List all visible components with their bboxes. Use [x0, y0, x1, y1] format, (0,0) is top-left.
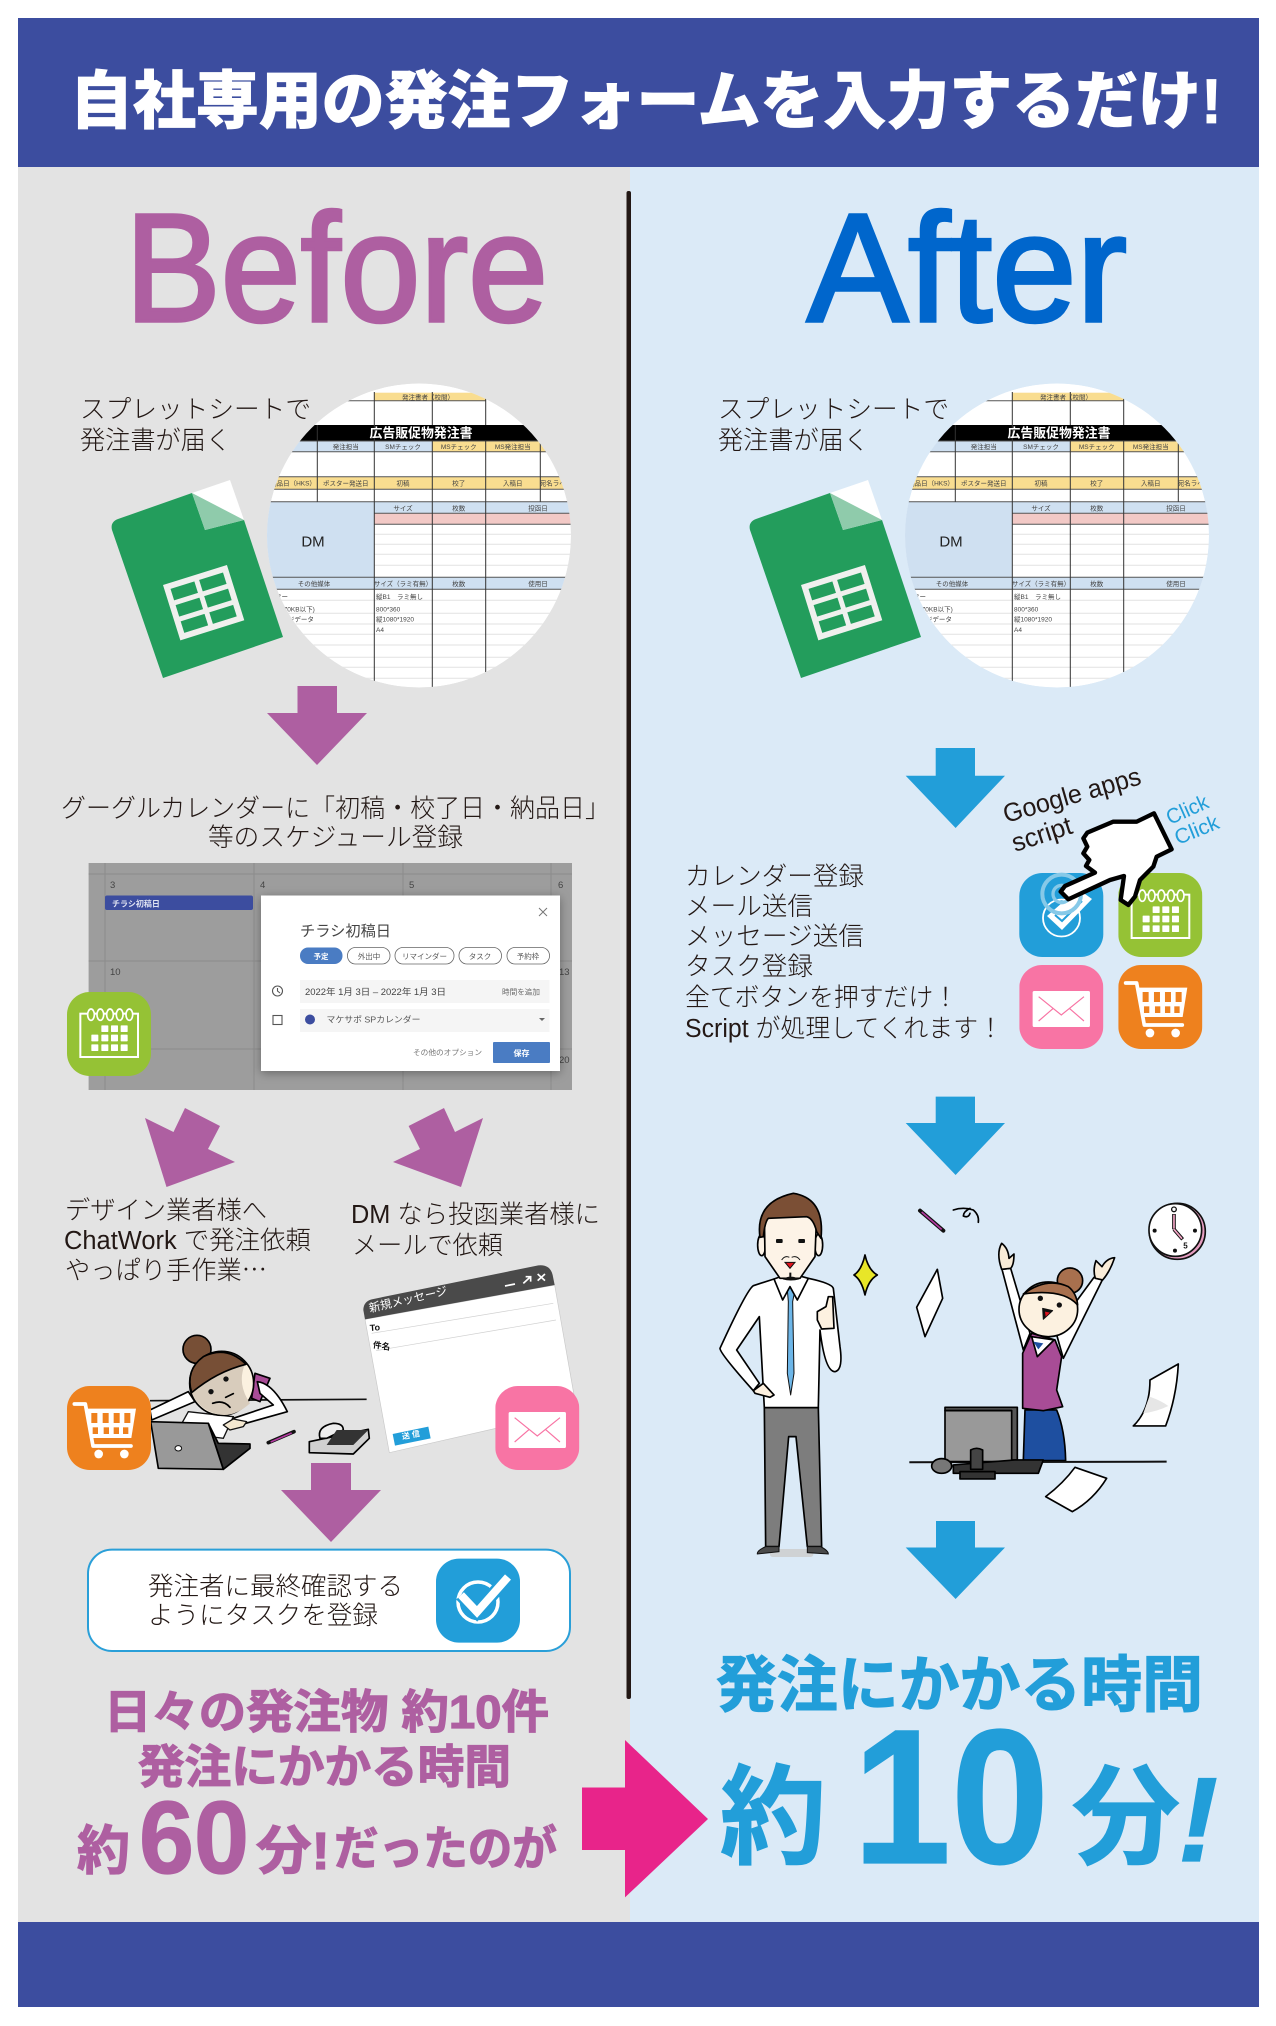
text: after spreadsheet note: スプレットシートで	[718, 396, 949, 424]
chart: after order sheet circle: 納品日（HKS）	[908, 478, 954, 488]
label: Google apps script: Google apps	[999, 761, 1144, 829]
chart: after order sheet circle: A4	[1014, 627, 1022, 634]
chart: after order sheet circle: 800*360	[1014, 606, 1039, 614]
label: Google apps script	[999, 761, 1144, 858]
icon: task check	[436, 1559, 520, 1643]
chart: after order sheet circle: 入稿日	[1141, 478, 1160, 488]
icon: mail app (after)	[1019, 965, 1103, 1049]
chart: before order sheet circle: 入稿日	[503, 478, 522, 488]
label: Click Click: Click	[1163, 790, 1213, 830]
chart: before order sheet circle: 発注担当	[333, 442, 359, 451]
chart: before order sheet circle: 納品日（HKS）	[270, 478, 316, 488]
icon: calendar app (before)	[67, 992, 151, 1076]
chart: after order sheet circle: 使用日	[1166, 579, 1186, 588]
text: after result	[716, 1651, 1218, 1904]
icon: mail app (before)	[495, 1386, 579, 1470]
chart: after order sheet circle	[898, 384, 1218, 688]
chart: before order sheet circle: 初稿	[396, 478, 410, 488]
arrow: before down 2	[281, 1463, 381, 1542]
chart: after order sheet circle: サイズ	[1031, 504, 1051, 512]
callout: task registration	[88, 1550, 570, 1651]
text: button actions: タスク登録	[685, 953, 813, 981]
event dialog: タスク	[469, 952, 491, 961]
arrow: before diagonal right	[393, 1108, 483, 1187]
text: calendar step: グーグルカレンダーに「初稿・校了日・納品日」	[61, 795, 610, 823]
event dialog: リマインダー	[402, 951, 447, 961]
chart: after order sheet circle: 発注担当	[971, 442, 997, 451]
text: after result: !	[1178, 1753, 1218, 1887]
calendar screenshot: 3	[110, 880, 115, 891]
text: button actions: メッセージ送信	[685, 923, 864, 951]
chart: after order sheet circle: 宛名ラベル	[1178, 478, 1211, 488]
icon: cart app (after)	[1118, 965, 1202, 1049]
calendar screenshot: 6	[558, 880, 563, 891]
text: DM vendor step	[351, 1201, 600, 1260]
illustration: businessman thumbs up	[720, 1193, 877, 1557]
chart: before order sheet circle: 縦1080*1920	[376, 614, 414, 624]
panel: before	[18, 167, 630, 1922]
event dialog: マケサポ SPカレンダー	[326, 1014, 420, 1024]
chart: after order sheet circle: サイズ（ラミ有無）	[1012, 579, 1070, 588]
calendar screenshot: 13	[559, 967, 570, 978]
email compose window: 送 信	[401, 1428, 421, 1441]
email compose window: To	[369, 1322, 381, 1333]
center divider	[626, 191, 631, 1699]
chart: before order sheet circle: 縦B1 ラミ無し	[376, 592, 423, 601]
text: design vendor step	[64, 1197, 311, 1287]
text: button actions: カレンダー登録	[685, 863, 864, 891]
text: before result: 発注にかかる時間	[138, 1741, 511, 1793]
text: calendar step: 等のスケジュール登録	[208, 824, 463, 852]
email compose window: 新規メッセージ	[368, 1284, 449, 1315]
chart: before order sheet circle: サイネージデータ	[262, 614, 314, 624]
label: Google apps script: script	[1008, 810, 1077, 858]
chart: before order sheet circle: サイズ	[393, 504, 413, 512]
arrow: after down 2	[906, 1097, 1005, 1175]
chart: before order sheet circle: MS発注担当	[495, 442, 531, 451]
footer band	[18, 1922, 1259, 2007]
event dialog	[261, 896, 560, 1071]
title: 自社専用の発注フォームを入力するだけ!	[70, 67, 1222, 137]
illustration: happy woman at desk	[909, 1203, 1205, 1512]
text: before result: 日々の発注物 約10件	[104, 1686, 549, 1738]
heading: Before: Before	[125, 182, 548, 354]
chart: after order sheet circle: 縦B1 ラミ無し	[1014, 592, 1061, 601]
chart: before order sheet circle: ポスター	[262, 592, 288, 601]
icon: cart app (before)	[67, 1386, 151, 1470]
text: before spreadsheet note	[80, 396, 311, 455]
event bar: チラシ初稿日	[112, 898, 160, 908]
chart: before order sheet circle: チラシ	[262, 626, 281, 634]
calendar screenshot: 20	[559, 1055, 570, 1066]
chart: before order sheet circle: ポスター発送日	[323, 478, 368, 488]
chart: after order sheet circle: ポスター	[900, 592, 926, 601]
panel: after	[630, 167, 1259, 1922]
text: calendar step	[61, 795, 610, 852]
text: before spreadsheet note: スプレットシートで	[80, 396, 311, 424]
chart: before order sheet circle: 800*360	[376, 606, 401, 614]
text: button actions	[685, 863, 1003, 1043]
callout: task registration: ようにタスクを登録	[148, 1602, 378, 1630]
text: before result: だったのが	[334, 1822, 557, 1875]
text: before result	[77, 1686, 557, 1895]
label: Click Click: Click	[1171, 811, 1223, 850]
calendar screenshot	[89, 863, 572, 1090]
calendar screenshot: 5	[409, 880, 414, 891]
text: button actions: 全てボタンを押すだけ！	[685, 984, 958, 1012]
chart: before order sheet circle: 発注書者（校閲）	[402, 392, 454, 402]
chart: after order sheet circle: SMチェック	[1023, 443, 1059, 451]
event dialog: 時間を追加	[502, 986, 540, 996]
text: DM vendor step: メールで依頼	[352, 1232, 503, 1260]
email compose window: 件名	[372, 1339, 391, 1352]
chart: before order sheet circle: MSチェック	[441, 443, 477, 451]
text: DM vendor step: DM なら投函業者様に	[351, 1201, 600, 1229]
text: design vendor step: ChatWork で発注依頼	[64, 1227, 311, 1255]
chart: after order sheet circle: ポスター発送日	[961, 478, 1006, 488]
text: after result: 10	[853, 1689, 1049, 1904]
text: after result: 発注にかかる時間	[716, 1651, 1203, 1719]
chart: before order sheet circle: バナー(70KB以下)	[262, 606, 315, 614]
chart: after order sheet circle: バナー(70KB以下)	[900, 606, 953, 614]
text: after result: 分	[1072, 1757, 1180, 1878]
chart: after order sheet circle: 投函日	[1166, 504, 1186, 512]
icon: pointing hand with ripple	[1042, 813, 1172, 913]
chart: after order sheet circle: MS発注担当	[1133, 442, 1169, 451]
icon: before spreadsheet document	[112, 480, 283, 678]
chart: before order sheet circle: DM	[301, 534, 325, 550]
chart: before order sheet circle: サイズ（ラミ有無）	[374, 579, 432, 588]
event dialog: 2022年 1月 3日 – 2022年 1月 3日	[305, 986, 446, 997]
text: before result: 約	[77, 1822, 130, 1881]
icon: task app (after)	[1019, 873, 1103, 957]
event dialog: 予定	[314, 952, 329, 961]
chart: before order sheet circle: 校了	[452, 478, 465, 488]
illustration: tired woman at laptop	[150, 1335, 369, 1469]
text: after spreadsheet note: 発注書が届く	[718, 427, 869, 455]
chart: after order sheet circle: 枚数	[1090, 504, 1104, 512]
chart: after order sheet circle: その他媒体	[936, 579, 969, 588]
text: after spreadsheet note	[718, 396, 949, 455]
text: button actions: Script が処理してくれます！	[685, 1015, 1003, 1043]
chart: after order sheet circle: サイネージデータ	[900, 614, 952, 624]
chart: after order sheet circle: 校了	[1090, 478, 1103, 488]
arrow: before to after	[582, 1740, 708, 1897]
chart: before order sheet circle: 投函日	[528, 504, 548, 512]
calendar screenshot: 10	[110, 967, 121, 978]
text: design vendor step: やっぱり手作業…	[65, 1250, 267, 1287]
chart: after order sheet circle: DM	[939, 534, 963, 550]
text: after result: 約	[720, 1757, 826, 1878]
icon: calendar app (after)	[1118, 873, 1202, 957]
chart: before order sheet circle: A4	[376, 627, 384, 634]
illustration: happy woman at desk: 5	[1183, 1242, 1188, 1251]
chart: after order sheet circle: チラシ	[900, 626, 919, 634]
icon: after spreadsheet document	[750, 480, 921, 678]
event dialog: 予約枠	[517, 951, 540, 961]
chart: after order sheet circle: 縦1080*1920	[1014, 614, 1052, 624]
chart: before order sheet circle: 使用日	[528, 579, 548, 588]
chart: before order sheet circle: 枚数	[452, 579, 466, 588]
chart: after order sheet circle: MSチェック	[1079, 443, 1115, 451]
chart: before order sheet circle: SMチェック	[385, 443, 421, 451]
arrow: after down 3	[906, 1521, 1005, 1599]
text: before result: 60	[139, 1780, 249, 1895]
event bar	[105, 896, 253, 910]
label: Click Click	[1163, 790, 1223, 850]
arrow: before down 1	[267, 686, 367, 765]
chart: after order sheet circle: 発注書者（校閲）	[1040, 392, 1092, 402]
chart: before order sheet circle	[260, 384, 580, 688]
chart: before order sheet circle: 広告販促物発注書	[370, 426, 472, 440]
chart: after order sheet circle: 広告販促物発注書	[1008, 426, 1110, 440]
arrow: after down 1	[906, 748, 1005, 828]
chart: before order sheet circle: 宛名ラベル	[540, 478, 573, 488]
text: before result: 分!	[256, 1823, 330, 1881]
chart: before order sheet circle: 枚数	[452, 504, 466, 512]
chart: after order sheet circle: 枚数	[1090, 579, 1104, 588]
event dialog: 外出中	[358, 951, 380, 961]
chart: after order sheet circle: 初稿	[1034, 478, 1048, 488]
event dialog: チラシ初稿日	[300, 923, 391, 940]
chart: before order sheet circle: その他媒体	[298, 579, 331, 588]
email compose window	[363, 1265, 577, 1453]
callout: task registration: 発注者に最終確認する	[148, 1573, 403, 1601]
event dialog: 保存	[514, 1048, 530, 1058]
heading: After: After	[807, 182, 1127, 354]
calendar screenshot: 4	[260, 880, 265, 891]
text: design vendor step: デザイン業者様へ	[65, 1197, 267, 1225]
event dialog: その他のオプション	[413, 1047, 482, 1057]
header banner	[18, 18, 1259, 167]
arrow: before diagonal left	[145, 1108, 235, 1187]
text: button actions: メール送信	[685, 893, 813, 921]
text: before spreadsheet note: 発注書が届く	[80, 427, 231, 455]
